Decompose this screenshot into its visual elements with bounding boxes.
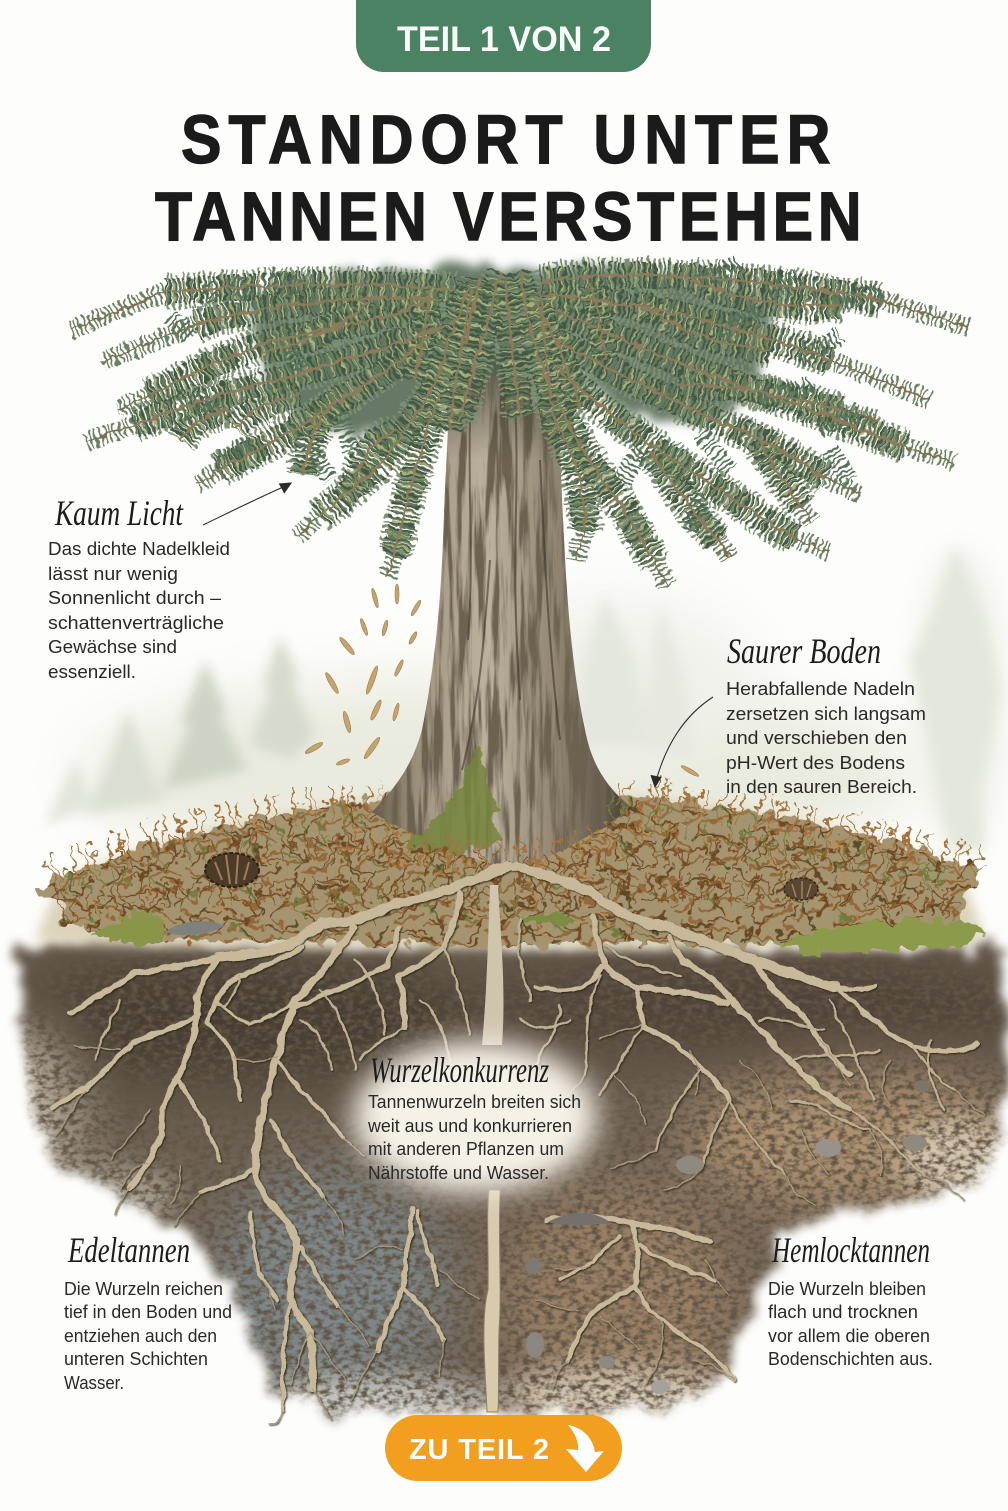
tree roots bbox=[53, 866, 985, 1425]
callout: Saurer Boden: in den sauren Bereich. bbox=[726, 776, 917, 797]
callout: Kaum Licht: Das dichte Nadelkleid bbox=[48, 538, 230, 559]
callout: Edeltannen: entziehen auch den bbox=[64, 1325, 217, 1346]
callout: Hemlocktannen: Hemlocktannen bbox=[771, 1230, 930, 1270]
callout: Edeltannen: Wasser. bbox=[64, 1372, 124, 1393]
callout: Hemlocktannen: vor allem die oberen bbox=[768, 1325, 930, 1346]
moss on trunk bbox=[405, 750, 500, 851]
title: TANNEN VERSTEHEN bbox=[155, 177, 862, 255]
bottom button: Zu Teil 2: ZU TEIL 2 bbox=[409, 1434, 549, 1466]
callout: Hemlocktannen: Bodenschichten aus. bbox=[768, 1348, 933, 1369]
soft cream background behind centre callout bbox=[353, 1041, 597, 1193]
callout: Saurer Boden: pH-Wert des Bodens bbox=[726, 752, 905, 773]
callout: Edeltannen: tief in den Boden und bbox=[64, 1301, 232, 1322]
forest floor needle litter bbox=[35, 795, 985, 949]
taproot bbox=[482, 885, 503, 1412]
callout: Hemlocktannen bbox=[768, 1230, 933, 1369]
callout: Wurzelkonkurrenz: weit aus und konkurrieren bbox=[367, 1115, 572, 1136]
misty forest background bbox=[45, 545, 1005, 875]
callout: Edeltannen: Die Wurzeln reichen bbox=[64, 1278, 223, 1299]
arrow: Kaum Licht to canopy bbox=[203, 483, 291, 525]
title: STANDORT UNTER bbox=[181, 100, 830, 178]
title bbox=[155, 100, 862, 255]
callout: Saurer Boden: Herabfallende Nadeln bbox=[726, 678, 915, 699]
callout: Wurzelkonkurrenz: Wurzelkonkurrenz bbox=[370, 1050, 549, 1090]
callout: Saurer Boden: und verschieben den bbox=[726, 727, 907, 748]
top badge: Teil 1 von 2 bbox=[356, 0, 651, 72]
callout: Edeltannen: unteren Schichten bbox=[64, 1348, 208, 1369]
dense inner foliage mass bbox=[253, 266, 769, 438]
callout: Wurzelkonkurrenz: Tannenwurzeln breiten sich bbox=[368, 1091, 581, 1112]
callout: Saurer Boden: zersetzen sich langsam bbox=[726, 703, 926, 724]
callout: Kaum Licht: Kaum Licht bbox=[54, 493, 184, 533]
moss patches and stones bbox=[90, 912, 985, 1394]
callout: Kaum Licht: Sonnenlicht durch – bbox=[48, 587, 222, 608]
callout: Kaum Licht: lässt nur wenig bbox=[48, 563, 178, 584]
callout: Hemlocktannen: Die Wurzeln bleiben bbox=[768, 1278, 926, 1299]
callout: Edeltannen: Edeltannen bbox=[67, 1230, 190, 1270]
callout: Kaum Licht: essenziell. bbox=[48, 661, 136, 682]
soil cross-section bbox=[0, 920, 1008, 1440]
callout: Hemlocktannen: flach und trocknen bbox=[768, 1301, 918, 1322]
callout: Kaum Licht bbox=[48, 493, 230, 682]
callout: Wurzelkonkurrenz bbox=[367, 1050, 581, 1183]
callout: Saurer Boden bbox=[726, 631, 926, 797]
needle tufts across litter bbox=[50, 796, 985, 905]
bottom button: Zu Teil 2 bbox=[385, 1415, 622, 1481]
tree trunk bbox=[372, 350, 632, 870]
arrow: Saurer Boden to litter bbox=[651, 697, 713, 787]
icon: curved down arrow bbox=[566, 1425, 604, 1472]
top badge: Teil 1 von 2: TEIL 1 VON 2 bbox=[397, 20, 611, 59]
callout: Kaum Licht: schattenverträgliche bbox=[48, 612, 224, 633]
callout: Wurzelkonkurrenz: mit anderen Pflanzen um bbox=[368, 1138, 564, 1159]
canopy of fir branches bbox=[70, 262, 968, 585]
callout: Kaum Licht: Gewächse sind bbox=[48, 636, 177, 657]
callout: Wurzelkonkurrenz: Nährstoffe und Wasser. bbox=[368, 1162, 549, 1183]
callout: Edeltannen bbox=[64, 1230, 232, 1393]
falling needles bbox=[304, 584, 700, 778]
pine cones bbox=[205, 853, 818, 900]
callout: Saurer Boden: Saurer Boden bbox=[727, 631, 881, 671]
